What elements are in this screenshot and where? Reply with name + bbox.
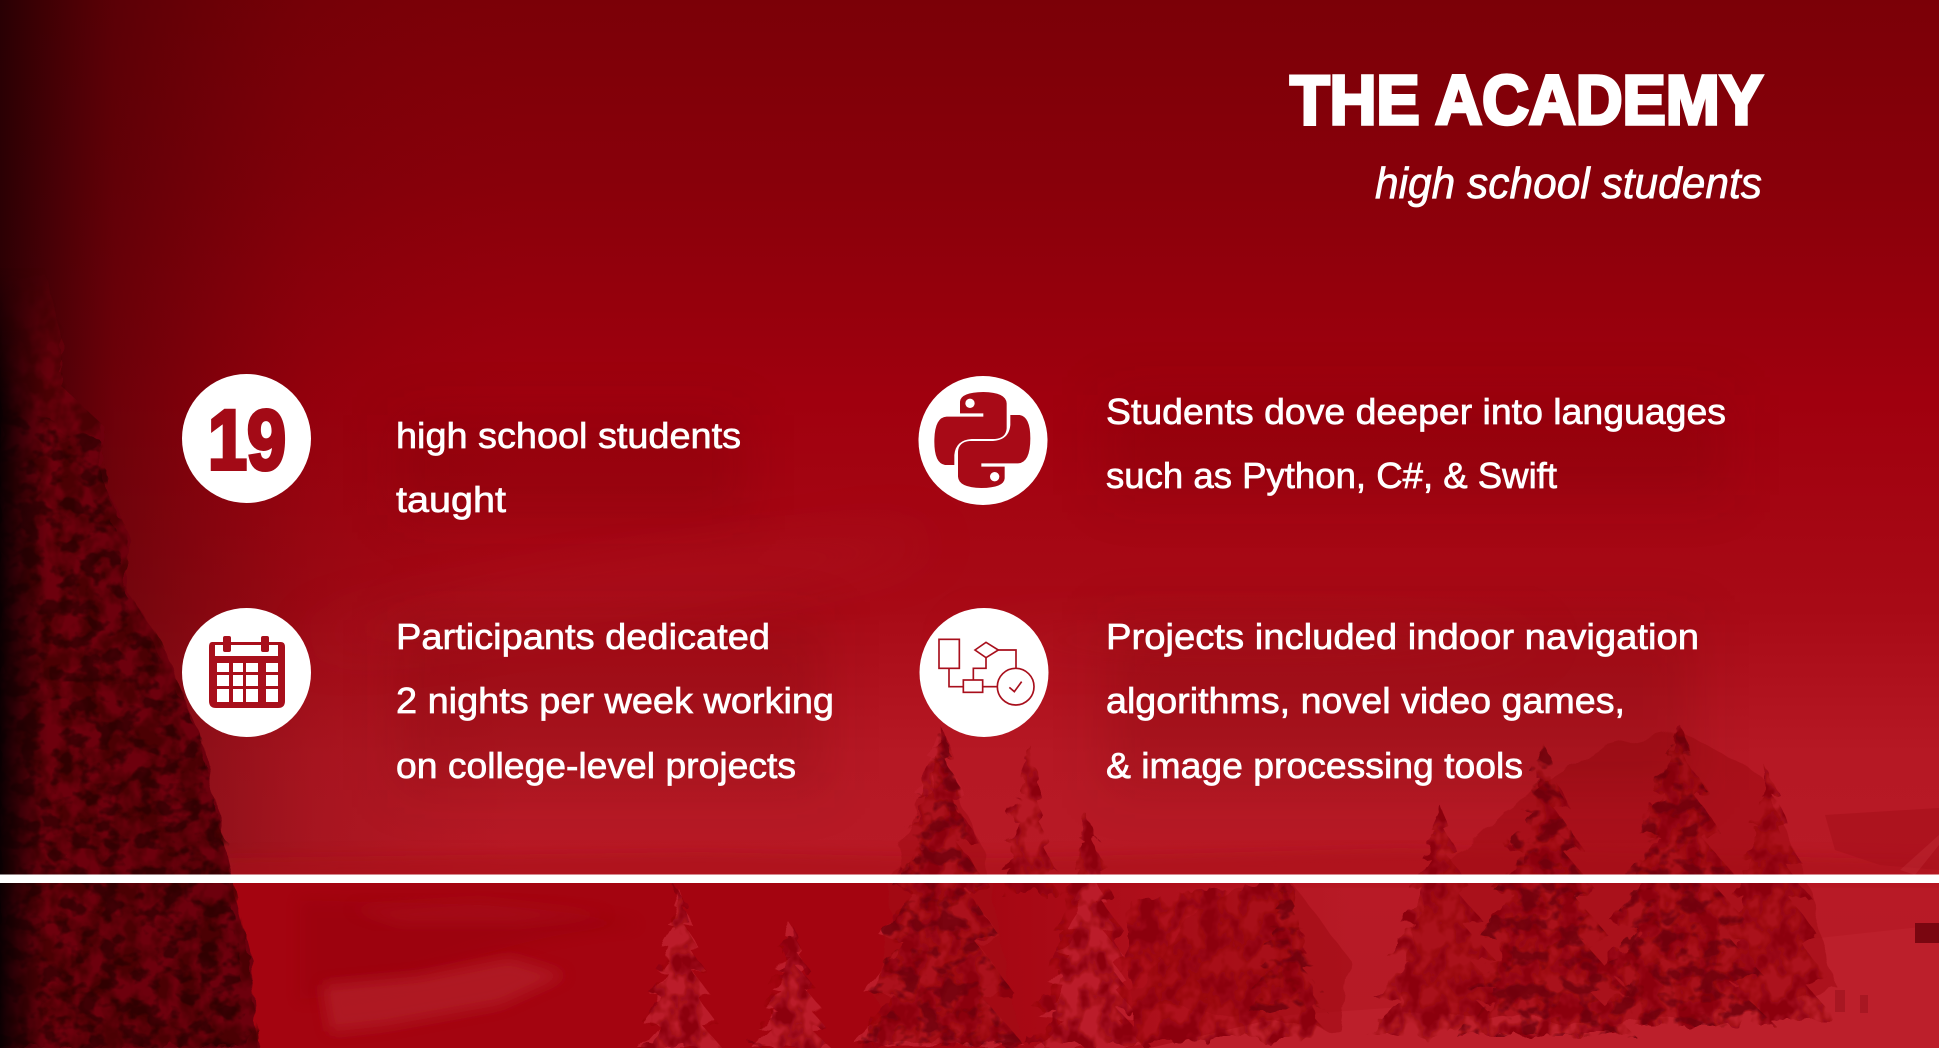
text: students taught: high school students: [396, 415, 741, 456]
text: projects: & image processing tools: [1106, 745, 1523, 786]
white divider line: [0, 874, 1939, 883]
icon: calendar: [182, 608, 311, 737]
text halos: [396, 395, 1726, 790]
subtitle: high school students: [1375, 159, 1762, 208]
text: languages: such as Python, C#, & Swift: [1106, 455, 1557, 496]
text: students taught: [396, 415, 741, 520]
text: languages: [1106, 391, 1726, 496]
title: THE ACADEMY: [1290, 61, 1763, 139]
text: time commitment: [396, 616, 834, 786]
item: projects: [920, 608, 1699, 786]
text: languages: Students dove deeper into languages: [1106, 391, 1726, 432]
item: languages: [918, 376, 1726, 505]
icon: flowchart: [920, 608, 1048, 737]
text: projects: Projects included indoor navigation: [1106, 616, 1699, 657]
text: projects: [1106, 616, 1699, 786]
item: 19 students: [182, 374, 741, 520]
background: dark foreground tree at left: [0, 268, 258, 1048]
text: time commitment: Participants dedicated: [396, 616, 770, 657]
icon: number 19: 19: [208, 393, 286, 487]
icon: python logo: [918, 376, 1048, 505]
item: time commitment: [182, 608, 834, 786]
text: time commitment: 2 nights per week working: [396, 680, 834, 721]
icon: number 19: [182, 374, 311, 503]
text: students taught: taught: [396, 479, 506, 520]
text: time commitment: on college-level projects: [396, 745, 796, 786]
text: projects: algorithms, novel video games,: [1106, 680, 1625, 721]
